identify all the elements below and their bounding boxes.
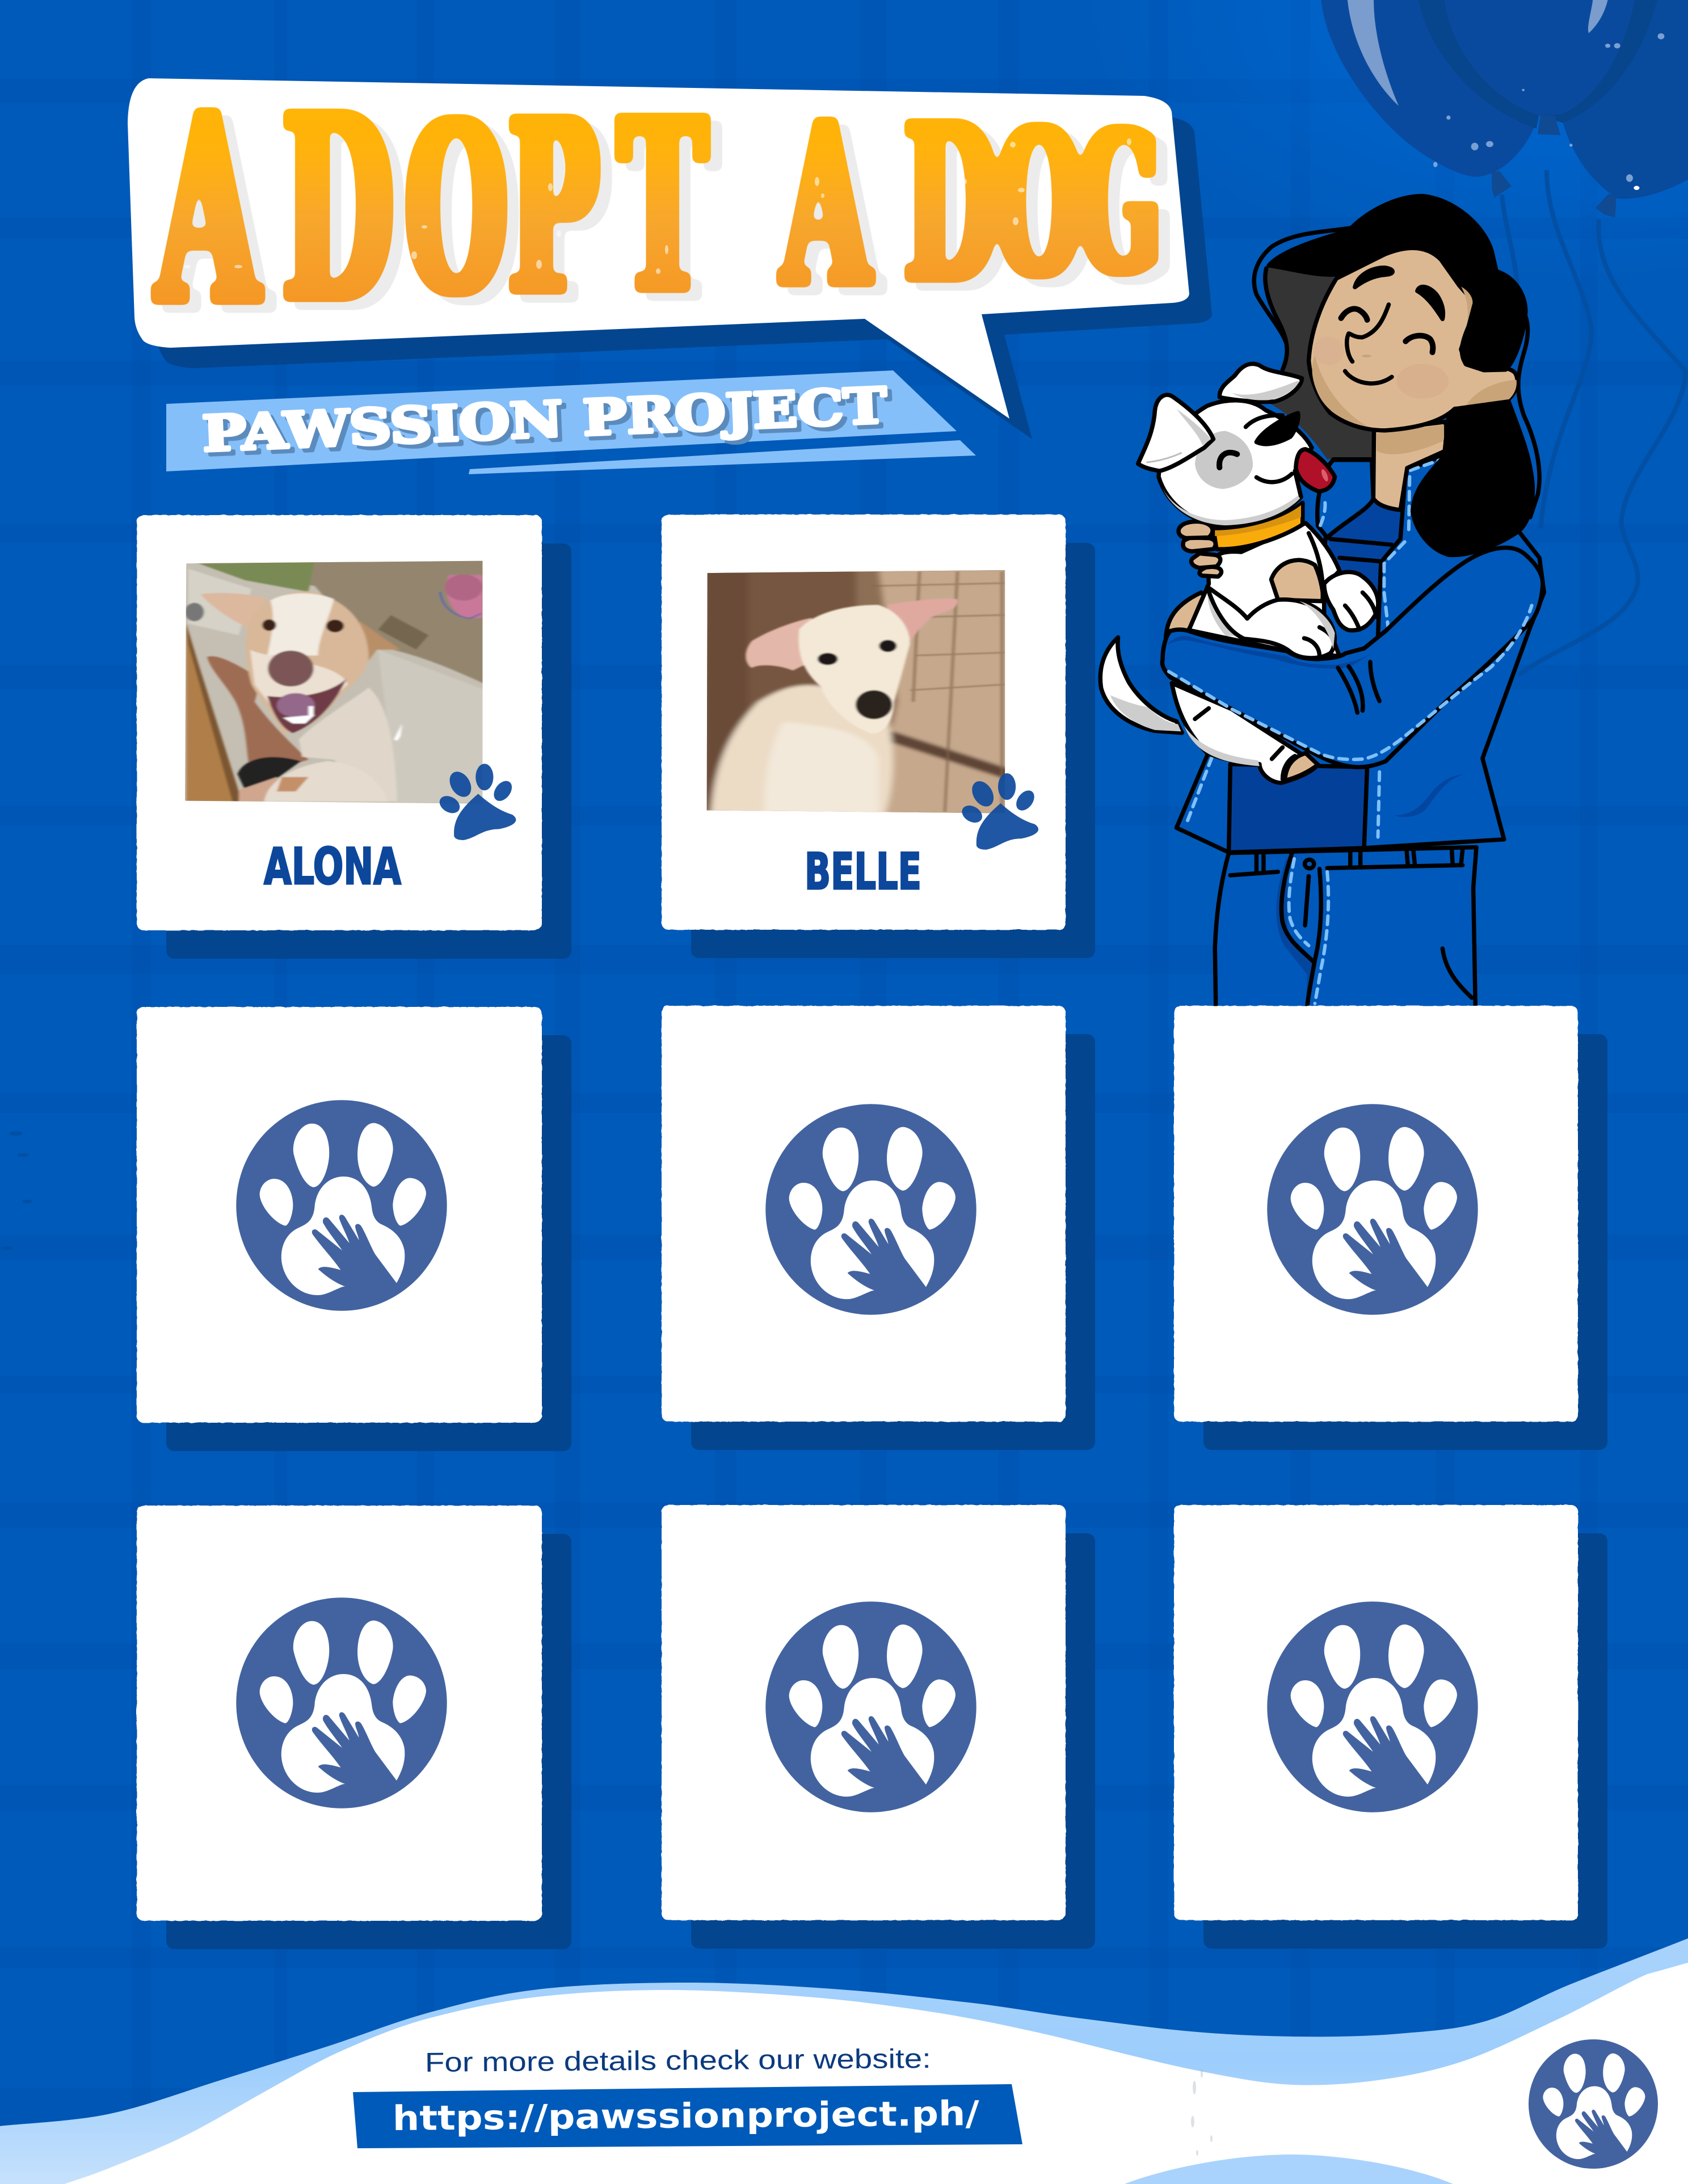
photo: Alona bbox=[182, 559, 486, 804]
balloon knots bbox=[1492, 115, 1617, 217]
card shadow bbox=[166, 543, 571, 959]
logo bbox=[1267, 1601, 1478, 1812]
title text: T bbox=[618, 67, 707, 345]
jacket torso bbox=[1176, 454, 1544, 853]
card paper bbox=[137, 515, 542, 930]
title text: O bbox=[996, 87, 1082, 320]
logo bbox=[765, 1104, 976, 1315]
placeholder card row 3 col 3 bbox=[1174, 1505, 1607, 1949]
website link box bbox=[353, 2084, 1022, 2148]
url: https://pawssionproject.ph/ bbox=[393, 2094, 979, 2139]
title text: D bbox=[904, 77, 998, 330]
balloon speckles bbox=[1433, 33, 1664, 190]
jeans bbox=[1215, 847, 1476, 1009]
wave light band bbox=[0, 1938, 1688, 2184]
photo: Belle bbox=[704, 568, 1008, 815]
neck bbox=[1373, 421, 1446, 510]
middle balloon bbox=[1418, 0, 1657, 129]
paw stamp bbox=[959, 773, 1038, 850]
illustration: woman hugging dog bbox=[1100, 196, 1544, 1009]
footer logo bbox=[1529, 2039, 1658, 2169]
dog top ear bbox=[1219, 364, 1302, 402]
wave bottom bump bbox=[1125, 2155, 1453, 2184]
title speckles bbox=[184, 138, 1131, 274]
top hair bbox=[1269, 196, 1526, 370]
paw stamp bbox=[436, 764, 516, 840]
ink splatter bbox=[1191, 2069, 1213, 2156]
bubble bbox=[128, 78, 1189, 419]
facial features bbox=[1341, 268, 1443, 383]
title text: P bbox=[508, 68, 598, 348]
title text: A bbox=[781, 73, 872, 337]
name: BELLE bbox=[805, 842, 921, 901]
title text: G bbox=[1078, 91, 1161, 317]
card 1: Alona bbox=[137, 515, 571, 959]
dog front legs bbox=[1207, 572, 1378, 658]
title text: O bbox=[406, 73, 507, 345]
title text bbox=[155, 57, 1161, 363]
title text: A bbox=[155, 57, 261, 363]
logo bbox=[765, 1601, 976, 1812]
placeholder card row 2 col 1 bbox=[137, 1007, 571, 1451]
logo bbox=[236, 1597, 447, 1808]
dog tail bbox=[1100, 638, 1182, 733]
footer label: For more details check our website: bbox=[425, 2044, 931, 2078]
left hand behind dog bbox=[1165, 592, 1207, 643]
ribbon lower stripe bbox=[469, 440, 976, 474]
bubble shadow bbox=[150, 99, 1212, 439]
face bbox=[1309, 248, 1517, 431]
title text: D bbox=[283, 59, 393, 359]
placeholder card row 2 col 3 bbox=[1174, 1006, 1607, 1450]
dog head bbox=[1159, 400, 1335, 526]
ribbon main band bbox=[166, 370, 957, 471]
subtitle text: PAWSSION PROJECT bbox=[201, 377, 888, 463]
placeholder card row 3 col 1 bbox=[137, 1506, 571, 1949]
back hair bbox=[1254, 228, 1539, 517]
card shadow bbox=[691, 543, 1095, 958]
name: ALONA bbox=[264, 837, 401, 896]
footer wave bbox=[0, 1938, 1688, 2184]
wave white area bbox=[65, 1963, 1688, 2184]
card 2: Belle bbox=[662, 515, 1095, 958]
lower hair bbox=[1413, 402, 1533, 555]
arm sleeve bbox=[1162, 547, 1543, 767]
placeholder card row 2 col 2 bbox=[662, 1006, 1095, 1450]
balloons bbox=[1321, 0, 1688, 217]
card paper bbox=[662, 515, 1066, 930]
balloon highlights bbox=[1348, 0, 1608, 106]
logo bbox=[1267, 1104, 1478, 1315]
balloon strings bbox=[1502, 170, 1686, 675]
inner shirt bbox=[1186, 454, 1463, 853]
placeholder card row 3 col 2 bbox=[662, 1505, 1095, 1949]
left balloon bbox=[1321, 0, 1542, 177]
dog left ear bbox=[1138, 395, 1214, 471]
subtitle ribbon bbox=[166, 370, 976, 474]
dog torso bbox=[1189, 523, 1340, 656]
speech bubble title panel bbox=[128, 57, 1212, 439]
dog lower body and hand bbox=[1172, 683, 1318, 783]
right balloon bbox=[1539, 0, 1688, 199]
logo bbox=[236, 1100, 447, 1311]
dog collar bbox=[1214, 503, 1303, 549]
fingers bbox=[1178, 521, 1222, 576]
